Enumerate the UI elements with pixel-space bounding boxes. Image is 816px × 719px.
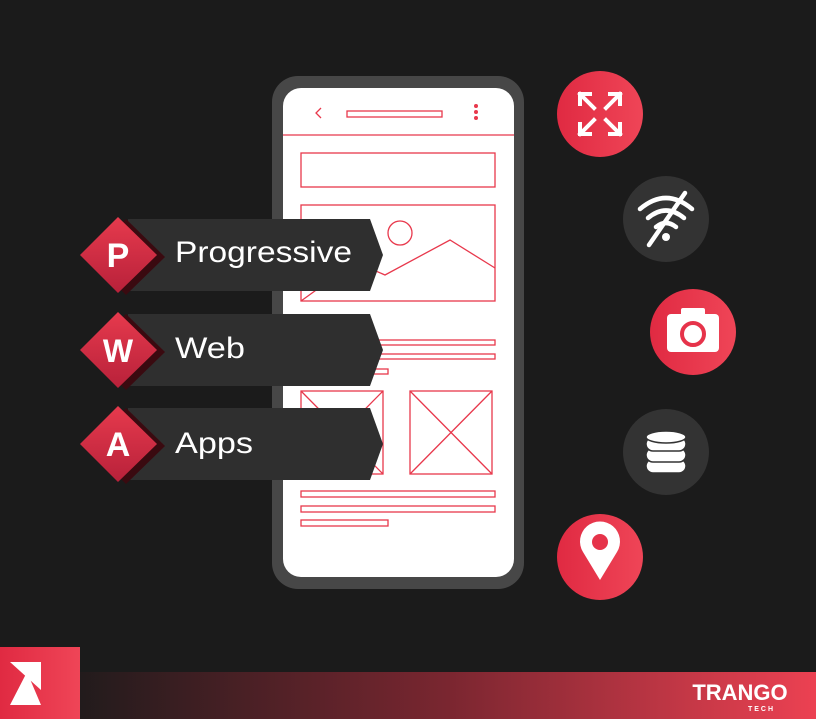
banner: Progressive <box>80 217 383 295</box>
banner: Web <box>80 312 383 390</box>
logo square <box>0 647 80 719</box>
icon: location pin <box>557 514 643 600</box>
icon: no wifi <box>623 176 709 262</box>
banner: Apps <box>80 406 383 484</box>
banner: Apps: Apps <box>175 427 253 460</box>
footer bar <box>80 672 816 719</box>
banner: Progressive: Progressive <box>175 236 352 269</box>
banner: Apps: A <box>106 426 130 464</box>
icon: camera <box>650 289 736 375</box>
footer bar: TRANGO <box>692 680 788 705</box>
phone <box>272 76 524 589</box>
icon: expand <box>557 71 643 157</box>
banner: Web: Web <box>175 332 245 365</box>
icon: database <box>623 409 709 495</box>
banner: Web: W <box>103 333 134 369</box>
banner: Progressive: P <box>107 237 129 275</box>
footer bar: TECH <box>748 706 775 713</box>
